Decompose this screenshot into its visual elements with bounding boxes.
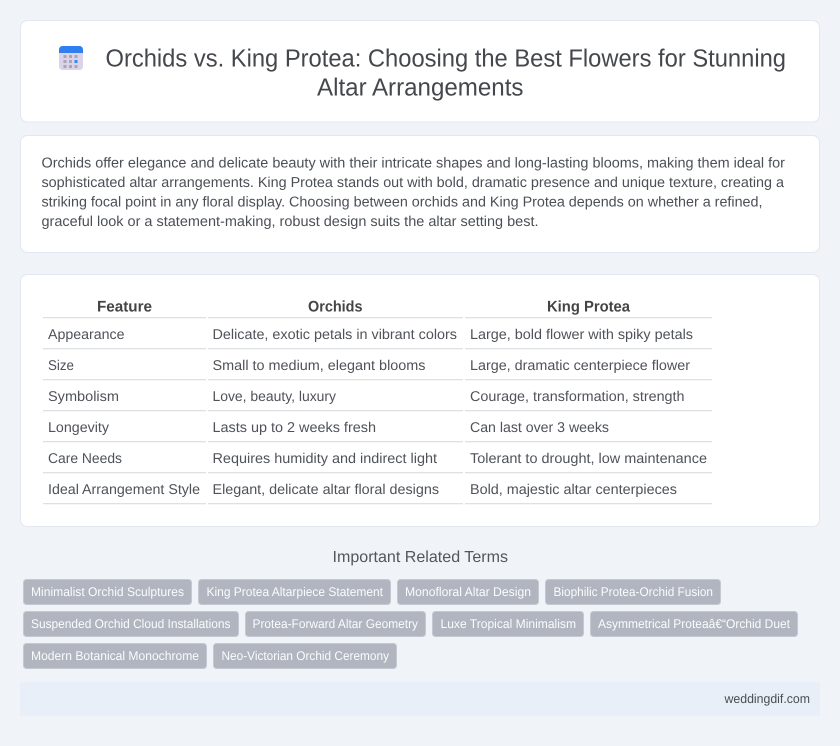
- panel: introduction: [20, 136, 820, 252]
- icon: calendar: [59, 46, 83, 70]
- text block: introduction paragraph: [42, 156, 785, 230]
- tag: [546, 580, 720, 604]
- table row: symbolism: [48, 389, 684, 405]
- table row: appearance: Appearance: [48, 327, 125, 343]
- table row: ideal arrangement style: Elegant, delicate altar floral designs: [212, 482, 439, 498]
- table row: symbolism: Love, beauty, luxury: [212, 389, 337, 405]
- text block: introduction paragraph: striking focal point in any floral display. Choosing between orchids and King Protea depends on whether a refined,: [42, 194, 762, 210]
- tag: [198, 580, 390, 604]
- table row: symbolism: Courage, transformation, strength: [470, 389, 684, 405]
- table row: size: Small to medium, elegant blooms: [212, 358, 426, 374]
- tag: Protea-Forward Altar Geometry: [252, 617, 419, 631]
- tag list: [24, 580, 798, 668]
- tag: [246, 612, 426, 636]
- tag: [398, 580, 538, 604]
- table header: [97, 298, 630, 316]
- text block: introduction paragraph: sophisticated altar arrangements. King Protea stands out with bold, dramatic presence and unique texture, creating a: [42, 175, 784, 191]
- footer: [20, 682, 820, 716]
- table header: Feature: [97, 298, 152, 316]
- tag: [24, 612, 238, 636]
- table row: care needs: [48, 451, 707, 467]
- tag: Asymmetrical Proteaâ€“Orchid Duet: [598, 617, 790, 631]
- text block: introduction paragraph: graceful look or a statement-making, robust design suits the altar setting best.: [42, 214, 538, 230]
- tag: Neo-Victorian Orchid Ceremony: [222, 649, 390, 663]
- tag: Modern Botanical Monochrome: [31, 649, 199, 663]
- table row: care needs: Tolerant to drought, low maintenance: [470, 451, 707, 467]
- tag: King Protea Altarpiece Statement: [206, 585, 383, 599]
- tag: [590, 612, 798, 636]
- tag: Minimalist Orchid Sculptures: [31, 585, 184, 599]
- table row: appearance: Delicate, exotic petals in vibrant colors: [212, 327, 457, 343]
- table row: ideal arrangement style: Ideal Arrangement Style: [48, 482, 200, 498]
- panel: comparison table: [20, 274, 820, 526]
- table row: longevity: Longevity: [48, 420, 110, 436]
- table row: longevity: Lasts up to 2 weeks fresh: [212, 420, 376, 436]
- footer: source: weddingdif.com: [724, 691, 810, 706]
- table row: care needs: Care Needs: [48, 451, 122, 467]
- table row: longevity: Can last over 3 weeks: [470, 420, 609, 436]
- tag: [432, 612, 584, 636]
- title: [106, 46, 786, 102]
- title: Altar Arrangements: [317, 74, 524, 102]
- tag: Monofloral Altar Design: [405, 585, 531, 599]
- table header: Orchids: [308, 298, 362, 316]
- title: Orchids vs. King Protea: Choosing the Best Flowers for Stunning: [106, 46, 786, 72]
- tag: Suspended Orchid Cloud Installations: [31, 617, 230, 631]
- table row: size: Large, dramatic centerpiece flower: [470, 358, 690, 374]
- panel: title card: [20, 20, 820, 122]
- table row: size: Size: [48, 358, 74, 374]
- tag: [214, 644, 396, 668]
- table row: appearance: [48, 327, 693, 343]
- text block: introduction paragraph: Orchids offer elegance and delicate beauty with their intricate shapes and long-lasting blooms, making them ideal for: [42, 156, 785, 172]
- table row: ideal arrangement style: [48, 482, 677, 498]
- table row: size: [48, 358, 690, 374]
- table header: King Protea: [547, 298, 630, 316]
- table row: care needs: Requires humidity and indirect light: [212, 451, 437, 467]
- tag: Luxe Tropical Minimalism: [440, 617, 576, 631]
- table row: ideal arrangement style: Bold, majestic altar centerpieces: [470, 482, 677, 498]
- table row: symbolism: Symbolism: [48, 389, 119, 405]
- table row: longevity: [48, 420, 609, 436]
- heading: important related terms: Important Related Terms: [332, 549, 508, 566]
- tag: [24, 580, 192, 604]
- tag: Biophilic Protea-Orchid Fusion: [554, 585, 713, 599]
- tag: [24, 644, 206, 668]
- table row: appearance: Large, bold flower with spiky petals: [470, 327, 693, 343]
